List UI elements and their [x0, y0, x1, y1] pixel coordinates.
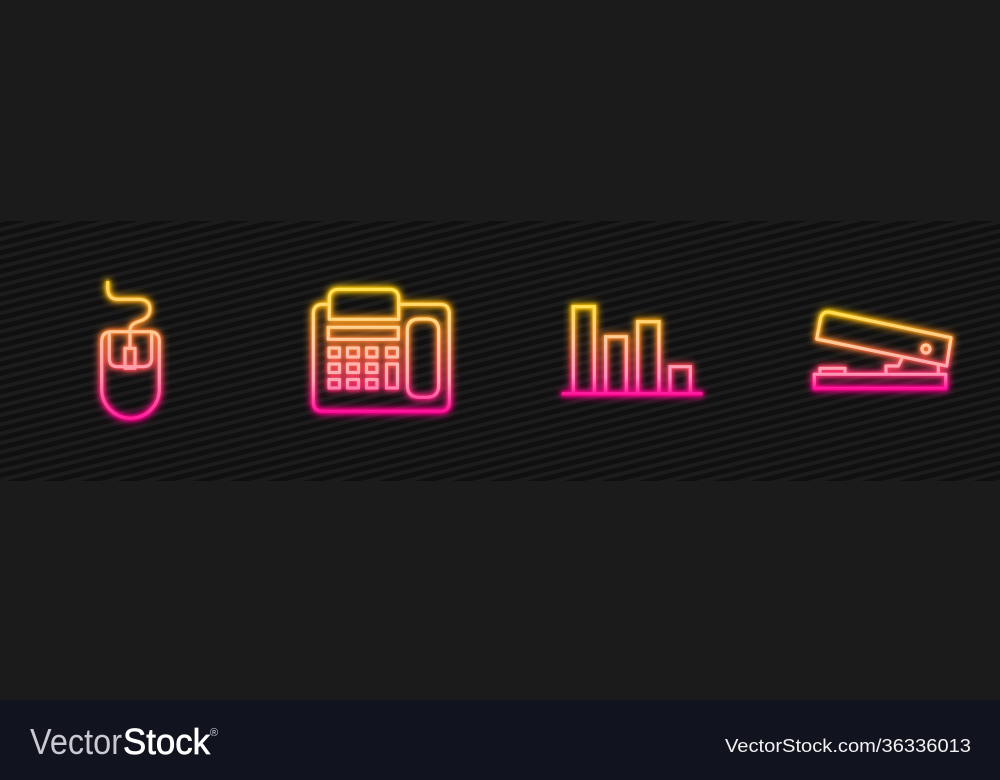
icon: fax telephone	[313, 289, 449, 411]
footer bar	[0, 700, 1000, 780]
VectorStock logo: Stock	[123, 721, 211, 762]
VectorStock logo	[30, 721, 218, 762]
icon: stapler	[814, 312, 951, 388]
image id text: VectorStock.com/36336013	[725, 736, 971, 756]
VectorStock logo: Vector	[30, 721, 122, 762]
icon: computer mouse	[102, 282, 159, 418]
striped central band	[0, 221, 1000, 481]
VectorStock logo: ®	[210, 727, 218, 739]
icon: bar chart	[563, 307, 701, 394]
